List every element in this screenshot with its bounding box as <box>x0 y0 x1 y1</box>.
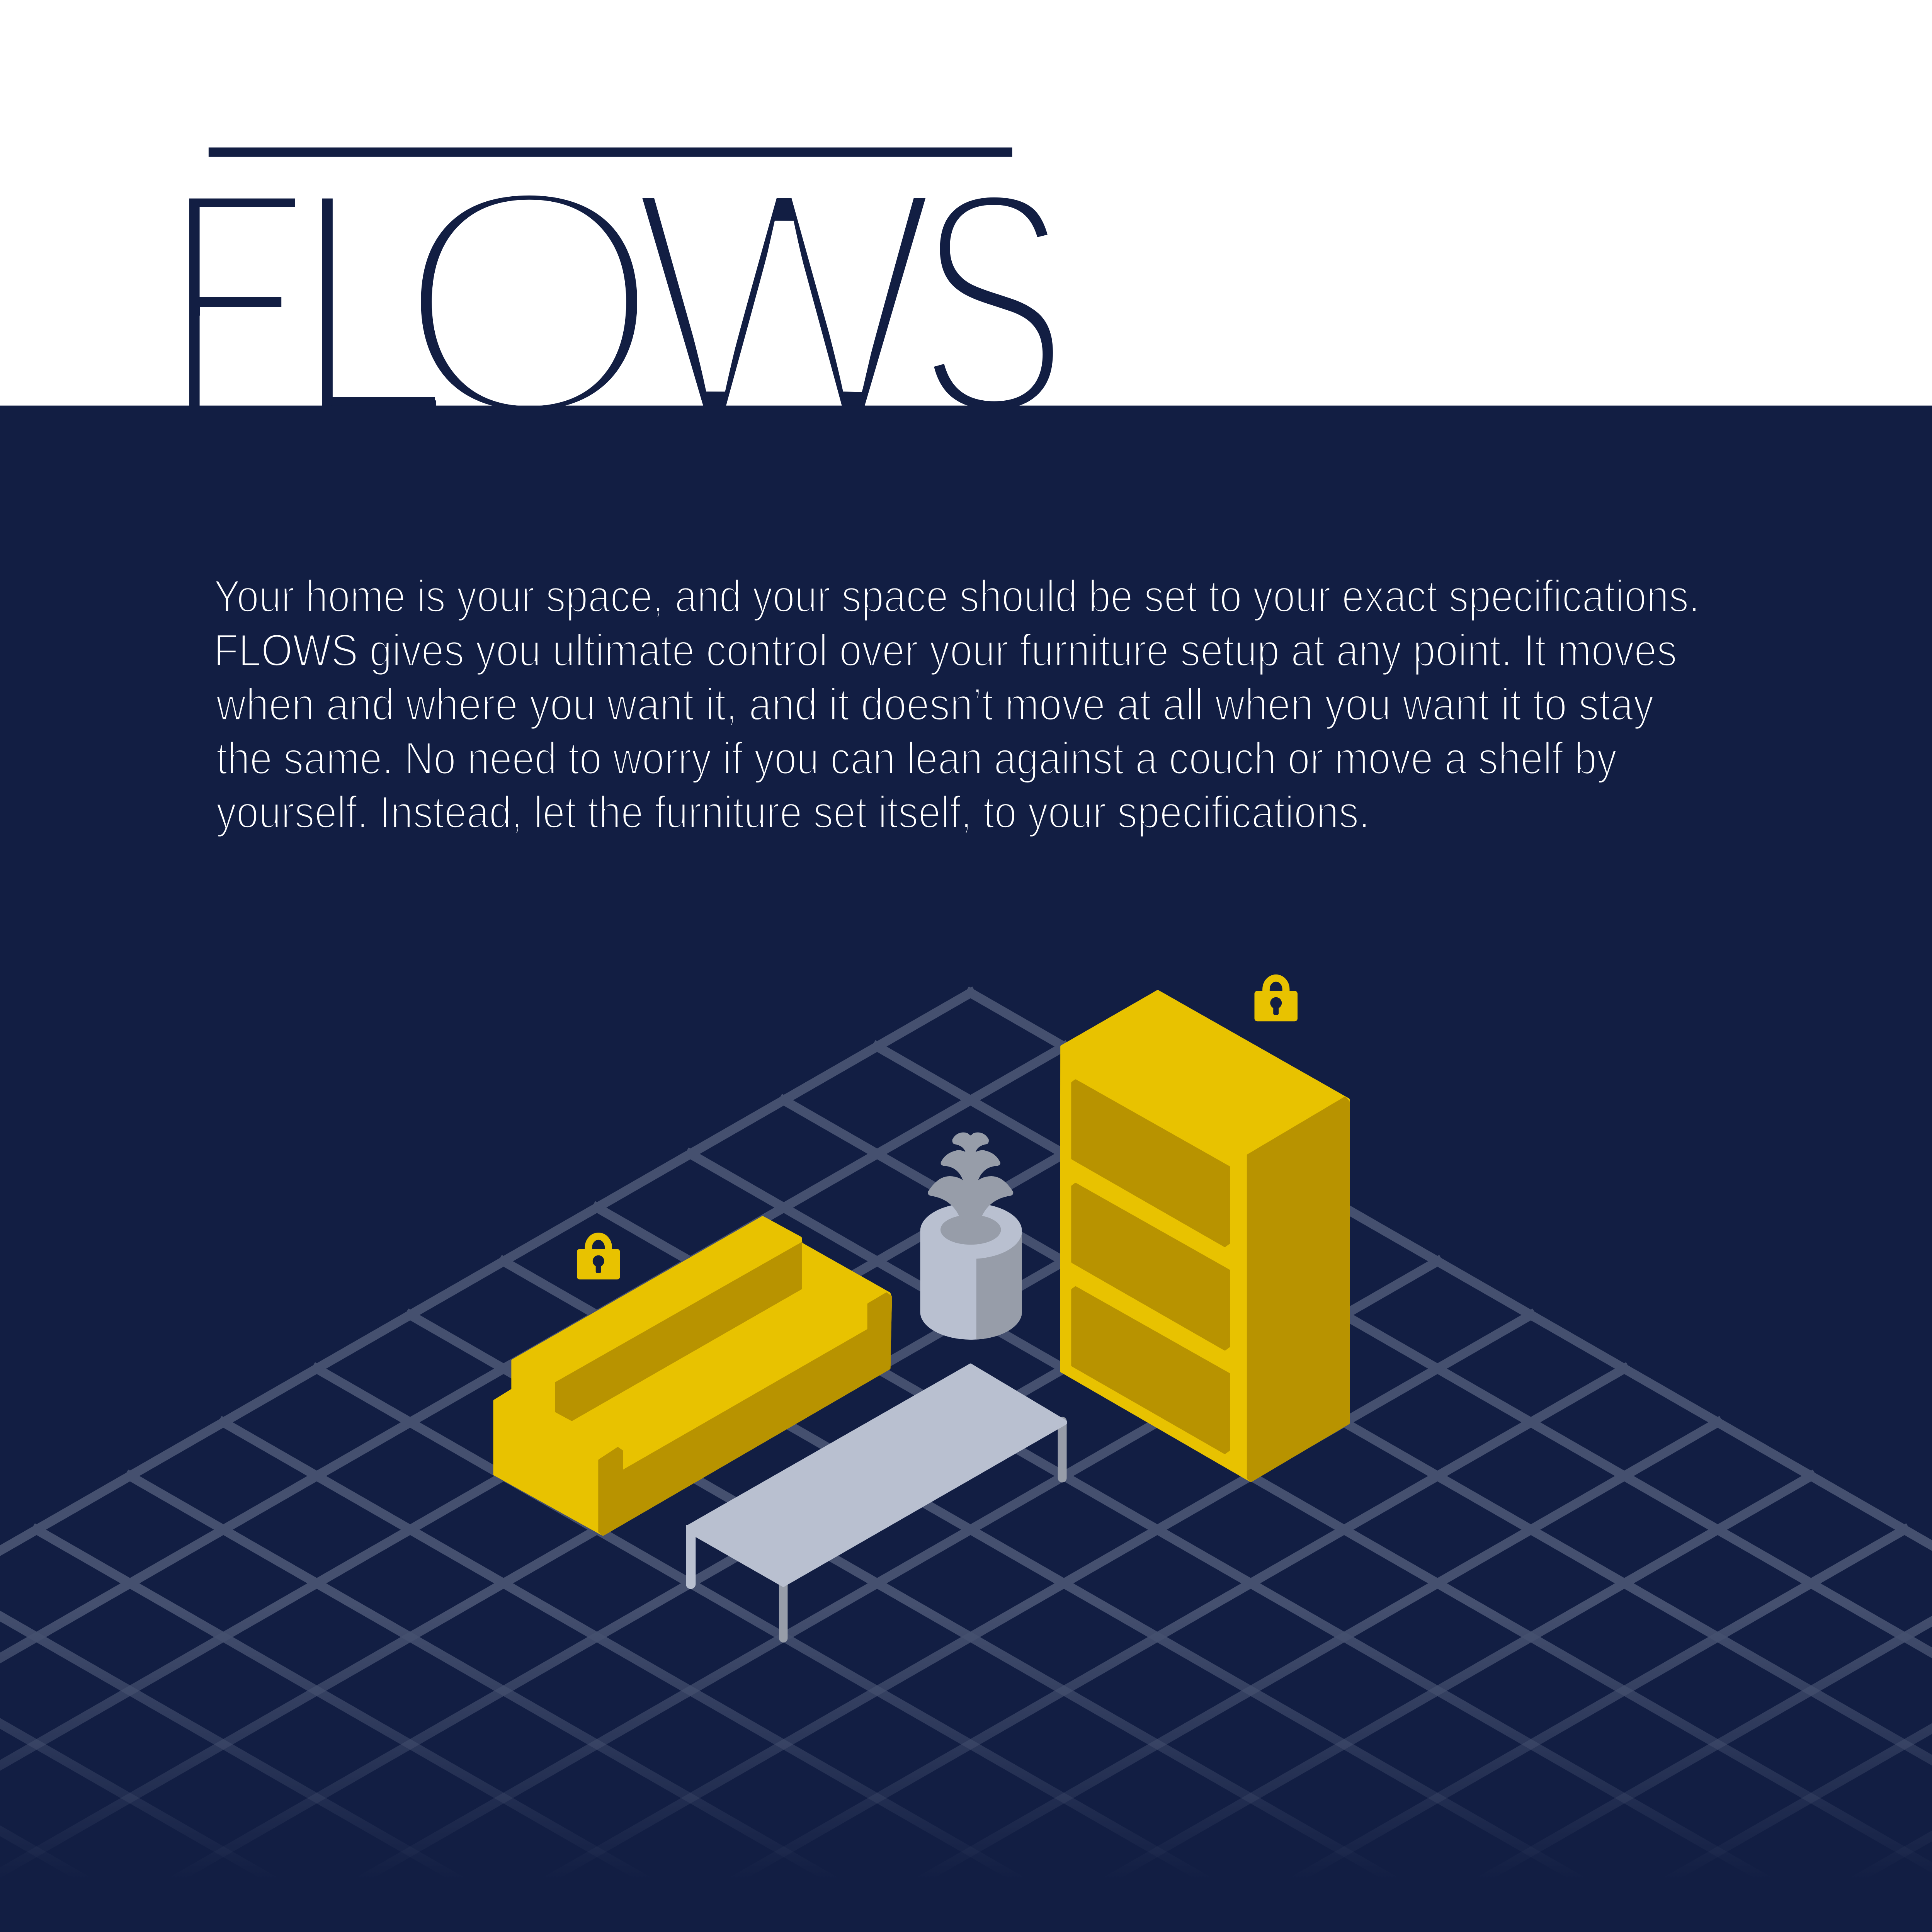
title rule <box>209 148 1012 157</box>
plant <box>928 1133 1013 1226</box>
title: letter bar adjustments <box>199 297 435 408</box>
body text: FLOWS gives you ultimate control over your furniture setup at any point. It moves <box>214 625 1677 676</box>
floor grid <box>0 993 1932 1932</box>
body text: Your home is your space, and your space should be set to your exact specifications. <box>214 571 1700 622</box>
icon: bookshelf lock <box>1254 978 1298 1021</box>
panel: navy background <box>0 406 1932 1932</box>
icon: sofa lock <box>577 1236 620 1279</box>
body text: yourself. Instead, let the furniture set itself, to your specifications. <box>216 787 1370 838</box>
coffee table <box>686 1365 1067 1643</box>
plant pot <box>920 1203 1022 1340</box>
sofa <box>495 1218 891 1534</box>
bookshelf shelves <box>1073 1081 1229 1452</box>
body text: when and where you want it, and it doesn’t move at all when you want it to stay <box>216 679 1654 730</box>
title <box>0 137 1087 411</box>
body text: the same. No need to worry if you can lean against a couch or move a shelf by <box>216 733 1617 784</box>
bookshelf <box>1061 992 1348 1481</box>
body text <box>214 571 1700 838</box>
